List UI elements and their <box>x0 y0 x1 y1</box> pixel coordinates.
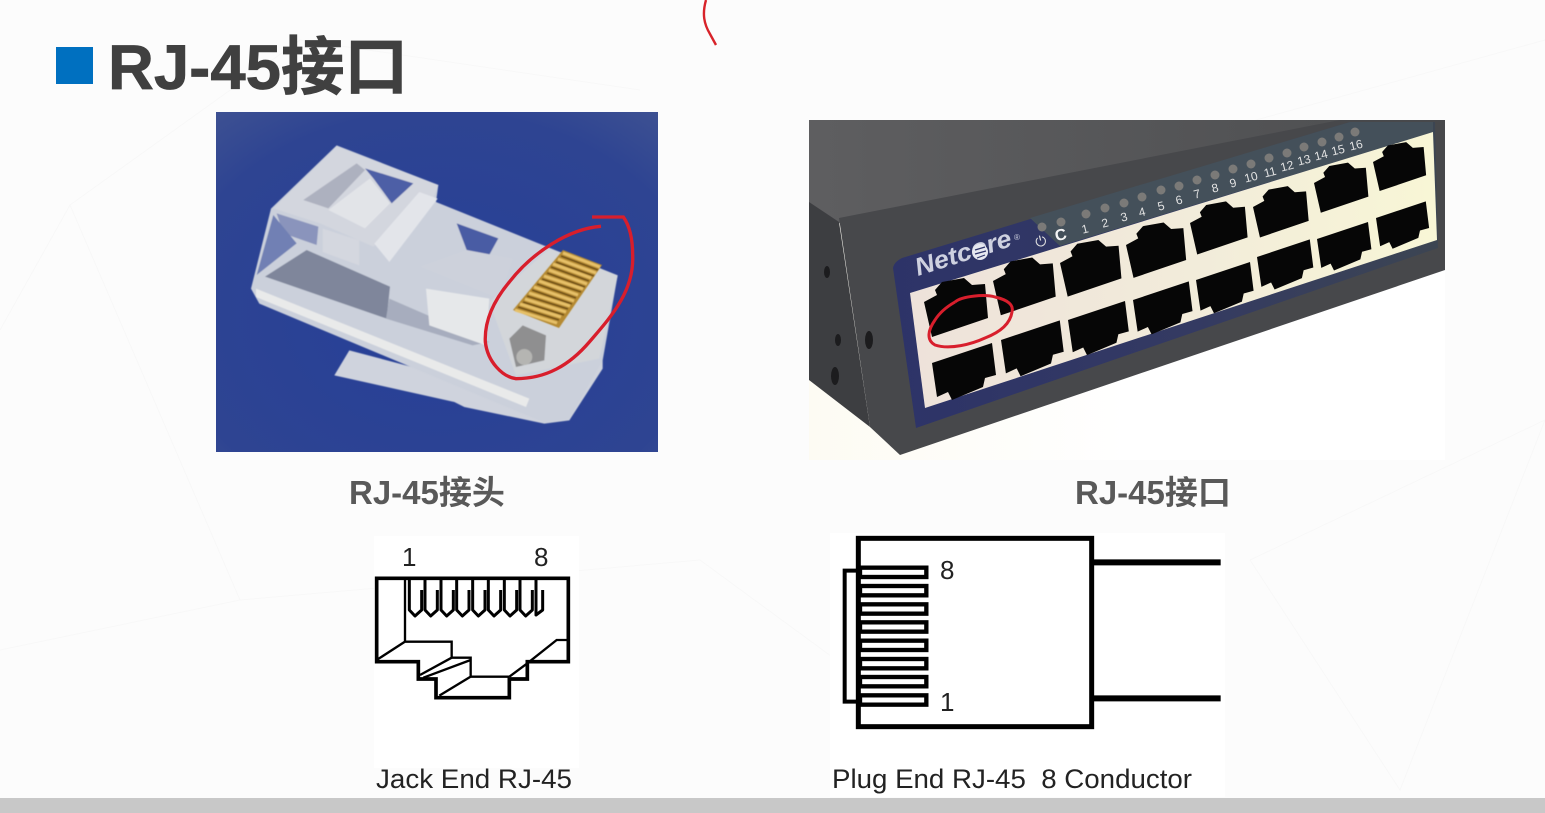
port number labels: 15 <box>1330 142 1347 159</box>
caption: RJ-45 port: RJ-45接口 <box>1075 474 1231 511</box>
bottom row of ports <box>932 201 1429 400</box>
brand label: ® <box>1014 233 1020 242</box>
diagram: plug end: 1 <box>940 687 954 717</box>
port number labels <box>1033 137 1365 250</box>
jack housing outline <box>377 578 568 698</box>
title marker square <box>56 47 93 84</box>
port number labels: 14 <box>1313 147 1330 164</box>
diagram: jack end <box>374 536 579 794</box>
port number labels: 8 <box>1210 180 1220 196</box>
diagram: plug end <box>830 533 1225 797</box>
red circle annotation <box>485 217 633 379</box>
indicator strip <box>1030 122 1433 246</box>
plug contacts <box>860 568 926 705</box>
plug clip <box>845 571 858 702</box>
photo: network switch with RJ-45 ports <box>809 120 1445 460</box>
port number labels: 1 <box>1080 221 1090 237</box>
jack inner steps <box>377 580 567 696</box>
switch top face <box>809 120 1445 224</box>
port number labels: 4 <box>1137 204 1147 220</box>
jack pins <box>409 580 543 616</box>
caption: RJ-45 connector: RJ-45接头 <box>349 474 505 511</box>
gold contacts <box>513 250 602 328</box>
plug caption: Plug End RJ-45 8 Conductor <box>832 764 1192 794</box>
port number labels: 5 <box>1156 198 1166 214</box>
switch side face <box>809 202 870 427</box>
screws <box>824 266 873 385</box>
title text: RJ-45接口 <box>108 33 408 103</box>
latch <box>334 350 603 424</box>
cream port panel <box>910 132 1437 408</box>
port number labels: ⏻ <box>1033 232 1048 250</box>
diagram: jack end: 8 <box>534 542 548 572</box>
port number labels: 12 <box>1279 158 1296 175</box>
jack caption: Jack End RJ-45 <box>376 764 572 794</box>
bottom bar <box>0 798 1545 813</box>
top row of ports <box>924 142 1426 337</box>
brand label: Netcore <box>911 225 1015 282</box>
port number labels: 13 <box>1296 152 1313 169</box>
port number labels: 10 <box>1243 169 1260 186</box>
status LEDs <box>1038 128 1360 232</box>
port number labels: 7 <box>1192 186 1202 202</box>
port number labels: 16 <box>1348 137 1365 154</box>
port number labels: 2 <box>1100 215 1110 231</box>
port number labels: 3 <box>1119 209 1129 225</box>
plug pin numbers: 8 <box>940 555 954 585</box>
title <box>56 33 408 103</box>
photo: RJ-45 connector <box>216 112 658 452</box>
port number labels: 6 <box>1174 192 1184 208</box>
plug body <box>858 538 1092 727</box>
switch front face <box>839 120 1445 455</box>
jack pin numbers: 1 <box>402 542 416 572</box>
connector body <box>251 145 618 423</box>
blue front plate <box>893 122 1438 428</box>
port number labels: C <box>1053 226 1069 245</box>
plug cables <box>1093 562 1221 698</box>
port number labels: 11 <box>1262 164 1278 180</box>
annotation: red stroke at top <box>704 0 716 45</box>
red circle annotation <box>929 296 1012 347</box>
port number labels: 9 <box>1228 175 1238 191</box>
